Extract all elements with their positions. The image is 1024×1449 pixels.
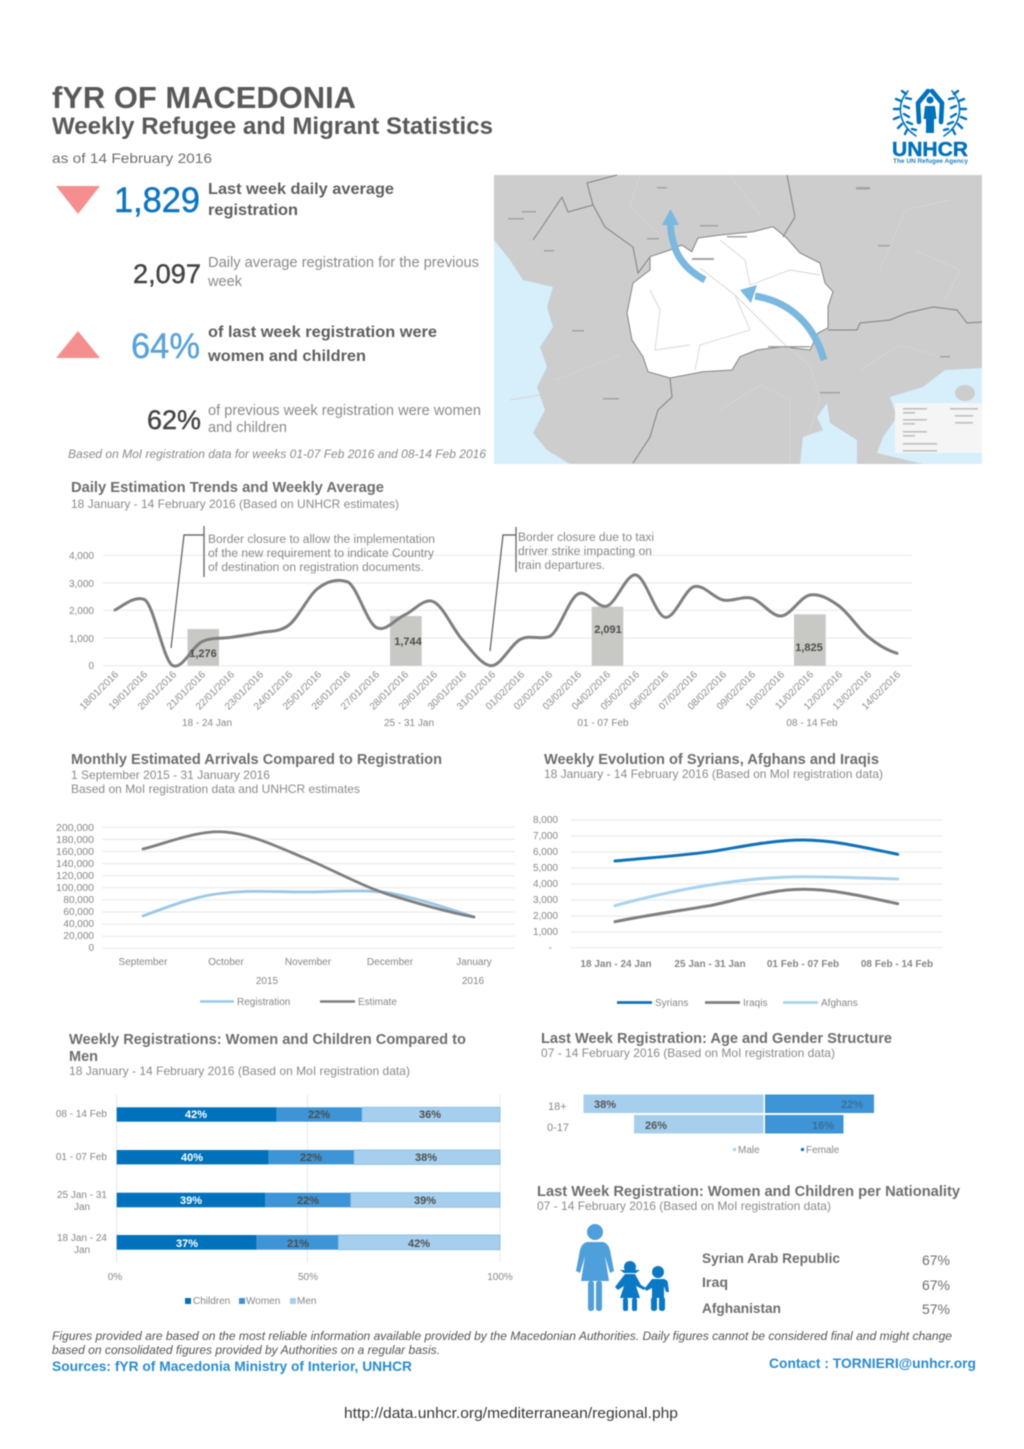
- heading: weekly nationality evolution: Weekly Evolution of Syrians, Afghans and Iraqis: [544, 752, 879, 768]
- date axis labels: 03/02/2016: [541, 669, 584, 713]
- week labels: 01 - 07 Feb: [577, 718, 629, 729]
- week labels: 18 Jan - 24 Jan: [580, 959, 652, 970]
- title: fYR OF MACEDONIA: [52, 80, 356, 115]
- icon: down triangle: [56, 186, 100, 214]
- y axis labels: 1,000: [69, 634, 94, 645]
- y axis labels: 4,000: [533, 879, 558, 890]
- y axis labels: 5,000: [533, 863, 558, 874]
- bar values: 1,825: [795, 642, 823, 654]
- y axis labels: 160,000: [56, 847, 94, 858]
- heading: daily estimation trends: Daily Estimation Trends and Weekly Average: [71, 480, 384, 496]
- y axis labels: 0: [88, 661, 94, 672]
- y axis labels: -: [549, 943, 552, 954]
- legend: [200, 997, 397, 1008]
- y axis labels: 140,000: [56, 859, 94, 870]
- bar values: 1,744: [394, 636, 423, 648]
- week labels: 25 Jan - 31 Jan: [674, 959, 746, 970]
- figure: women and children last week: of last week registration were: [208, 324, 437, 341]
- legend: Female: [806, 1145, 840, 1156]
- heading: women and children per nationality: 07 - 14 February 2016 (Based on MoI registration data): [537, 1199, 831, 1213]
- place name marks: [508, 187, 950, 400]
- y axis labels: 7,000: [533, 831, 558, 842]
- row: 08 - 14 Feb: 42%: [185, 1109, 207, 1121]
- week labels: 01 Feb - 07 Feb: [767, 959, 839, 970]
- figure: women and children previous week: of previous week registration were women: [208, 402, 481, 419]
- heading: age and gender: Last Week Registration: Age and Gender Structure: [541, 1031, 892, 1047]
- laurel wreath: [894, 91, 966, 136]
- y axis labels: 180,000: [56, 835, 94, 846]
- date axis labels: 07/02/2016: [657, 669, 700, 713]
- date axis labels: 21/01/2016: [165, 669, 208, 713]
- date axis labels: 04/02/2016: [570, 669, 613, 713]
- y axis labels: [56, 823, 94, 954]
- row: 08 - 14 Feb: 08 - 14 Feb: [56, 1109, 107, 1120]
- date axis labels: 20/01/2016: [136, 669, 179, 713]
- legend: Registration: [237, 997, 290, 1008]
- table: women and children per nationality: Afghanistan: [702, 1300, 781, 1316]
- chart: monthly arrivals vs registration: [56, 823, 515, 1008]
- row: 18 Jan - 24 Jan: 42%: [408, 1238, 430, 1250]
- row: 18 Jan - 24 Jan: 21%: [287, 1238, 309, 1250]
- heading: women and children vs men: Men: [69, 1049, 98, 1065]
- date axis labels: 19/01/2016: [107, 669, 150, 713]
- legend: Women: [246, 1296, 280, 1307]
- contact: Contact : TORNIERI@unhcr.org: [769, 1355, 976, 1371]
- chart: age and gender pyramid: 16%: [812, 1120, 834, 1132]
- date axis labels: 18/01/2016: [78, 669, 121, 713]
- chart: age and gender pyramid: [547, 1094, 874, 1156]
- line: registration: [143, 891, 474, 917]
- row: 25 - 31 Jan: [57, 1190, 500, 1213]
- figure: previous week daily average: Daily average registration for the previous: [208, 254, 479, 271]
- month labels: November: [285, 957, 332, 968]
- y axis labels: 2,000: [69, 606, 94, 617]
- line: Iraqis: [615, 889, 898, 922]
- icon: up triangle: [56, 331, 100, 358]
- figure: women and children previous week: [147, 402, 481, 436]
- note: data basis: Based on MoI registration data for weeks 01-07 Feb 2016 and 08-14 Feb 2016: [68, 447, 486, 461]
- row: 18 Jan - 24 Jan: 18 Jan - 24: [57, 1233, 107, 1244]
- month labels: January: [456, 957, 492, 968]
- x axis labels: 100%: [487, 1272, 513, 1283]
- table: women and children per nationality: [702, 1250, 950, 1317]
- callout: border closure, new requirement: of the new requirement to indicate Country: [208, 548, 434, 560]
- legend: [617, 998, 858, 1009]
- legend: Male: [738, 1145, 760, 1156]
- legend: Estimate: [358, 997, 397, 1008]
- row: 01 - 07 Feb: [56, 1150, 500, 1164]
- arrow: route from Greece: [740, 285, 824, 360]
- row: 18 Jan - 24 Jan: 37%: [176, 1238, 198, 1250]
- heading: weekly nationality evolution: [544, 752, 883, 781]
- callout: border closure, new requirement: [171, 526, 435, 648]
- figure: previous week daily average: 2,097: [133, 259, 201, 289]
- arrow: northbound route: [662, 209, 705, 280]
- legend: Children: [193, 1296, 230, 1307]
- x axis labels: [108, 1272, 513, 1283]
- week labels: 18 - 24 Jan: [182, 718, 232, 729]
- chart: daily estimation line with weekly average bars: [69, 526, 912, 729]
- country borders: [533, 175, 982, 463]
- line: Afghans: [615, 877, 898, 906]
- row: 25 - 31 Jan: 25 Jan - 31: [57, 1190, 107, 1201]
- heading: women and children vs men: Weekly Registrations: Women and Children Compared to: [69, 1032, 466, 1048]
- y axis labels: 8,000: [533, 815, 558, 826]
- y axis labels: 3,000: [533, 895, 558, 906]
- bar values: 1,276: [189, 648, 217, 660]
- month labels: 2015: [256, 976, 279, 987]
- row: 25 - 31 Jan: Jan: [74, 1202, 90, 1213]
- chart: age and gender pyramid: 22%: [841, 1099, 863, 1111]
- date axis labels: 27/01/2016: [339, 669, 382, 713]
- date axis labels: 26/01/2016: [310, 669, 353, 713]
- icon: UNHCR logo: UNHCR: [892, 139, 969, 161]
- row: 01 - 07 Feb: 22%: [300, 1152, 322, 1164]
- week labels: [580, 959, 933, 970]
- x axis labels: 0%: [108, 1272, 122, 1283]
- bar values: [189, 624, 823, 660]
- legend box: [895, 403, 982, 453]
- title: as of 14 February 2016: [52, 150, 212, 166]
- month labels: September: [119, 957, 168, 968]
- figure: last week daily average: [114, 181, 394, 220]
- date axis labels: 13/02/2016: [831, 669, 874, 713]
- figure: last week daily average: 1,829: [114, 181, 200, 220]
- callout: border closure, taxi strike: driver strike impacting on: [518, 546, 652, 558]
- row: 08 - 14 Feb: 22%: [308, 1109, 330, 1121]
- figure: last week daily average: registration: [208, 202, 298, 219]
- bar values: 2,091: [594, 624, 622, 636]
- y axis labels: 4,000: [69, 551, 94, 562]
- date axis labels: 30/01/2016: [426, 669, 469, 713]
- y axis labels: 20,000: [63, 931, 94, 942]
- title: Weekly Refugee and Migrant Statistics: [52, 113, 493, 140]
- date axis labels: [78, 669, 903, 713]
- figure: women and children last week: women and children: [207, 348, 366, 365]
- legend: [185, 1296, 316, 1307]
- callout: border closure, new requirement: of destination on registration documents.: [208, 562, 424, 574]
- heading: daily estimation trends: 18 January - 14 February 2016 (Based on UNHCR estimates): [71, 497, 399, 511]
- heading: women and children per nationality: [537, 1184, 960, 1213]
- table: women and children per nationality: 67%: [922, 1277, 950, 1293]
- date axis labels: 24/01/2016: [252, 669, 295, 713]
- figure: last week daily average: Last week daily average: [208, 181, 394, 198]
- y axis labels: 100,000: [56, 883, 94, 894]
- figure: women and children last week: 64%: [131, 327, 200, 366]
- date axis labels: 10/02/2016: [744, 669, 787, 713]
- date axis labels: 22/01/2016: [194, 669, 237, 713]
- chart: age and gender pyramid: 38%: [594, 1099, 616, 1111]
- heading: monthly arrivals: Based on MoI registration data and UNHCR estimates: [71, 782, 360, 796]
- row: 08 - 14 Feb: [56, 1107, 500, 1122]
- y axis labels: 3,000: [69, 579, 94, 590]
- legend: [733, 1145, 840, 1156]
- date axis labels: 23/01/2016: [223, 669, 266, 713]
- footer note: [52, 1329, 952, 1357]
- callout: border closure, taxi strike: train departures.: [518, 560, 605, 572]
- chart: stacked bars women, children, men: [56, 1095, 513, 1307]
- table: women and children per nationality: Iraq: [702, 1274, 728, 1290]
- person: [924, 96, 936, 133]
- row: 18 Jan - 24 Jan: [57, 1233, 500, 1256]
- legend: Iraqis: [743, 998, 767, 1009]
- y axis labels: 2,000: [533, 911, 558, 922]
- sources: Sources: fYR of Macedonia Ministry of Interior, UNHCR: [52, 1358, 412, 1374]
- table: women and children per nationality: 57%: [922, 1301, 950, 1317]
- footer note: based on consolidated figures provided by Authorities on a regular basis.: [52, 1343, 440, 1357]
- date axis labels: 28/01/2016: [368, 669, 411, 713]
- date axis labels: 25/01/2016: [281, 669, 324, 713]
- heading: daily estimation trends: [71, 480, 399, 511]
- callout: border closure, taxi strike: Border closure due to taxi: [518, 532, 654, 544]
- y axis labels: 0: [88, 943, 94, 954]
- y axis labels: 120,000: [56, 871, 94, 882]
- line: Syrians: [615, 840, 898, 861]
- chart: weekly evolution by nationality: [533, 815, 943, 1009]
- y axis labels: 6,000: [533, 847, 558, 858]
- row: 01 - 07 Feb: 40%: [181, 1152, 203, 1164]
- week labels: 25 - 31 Jan: [384, 718, 434, 729]
- figure: previous week daily average: week: [207, 273, 242, 290]
- date axis labels: 01/02/2016: [484, 669, 527, 713]
- heading: women and children vs men: 18 January - 14 February 2016 (Based on MoI registration data): [69, 1064, 410, 1078]
- date axis labels: 14/02/2016: [860, 669, 903, 713]
- row: 18 Jan - 24 Jan: Jan: [74, 1245, 90, 1256]
- y axis labels: [69, 551, 94, 672]
- legend: Men: [297, 1296, 316, 1307]
- daily line: [115, 575, 897, 666]
- line: estimate: [143, 832, 474, 917]
- row: 25 - 31 Jan: 39%: [180, 1195, 202, 1207]
- month labels: October: [208, 957, 244, 968]
- month labels: [119, 957, 492, 987]
- row: 25 - 31 Jan: 39%: [414, 1195, 436, 1207]
- week labels: 08 Feb - 14 Feb: [861, 959, 933, 970]
- week labels: 08 - 14 Feb: [786, 718, 838, 729]
- heading: women and children vs men: [69, 1032, 466, 1078]
- minor roads and regions: [510, 175, 960, 464]
- month labels: 2016: [462, 976, 485, 987]
- x axis labels: 50%: [298, 1272, 318, 1283]
- chart: age and gender pyramid: 26%: [645, 1120, 667, 1132]
- figure: women and children last week: [131, 324, 437, 366]
- date axis labels: 08/02/2016: [686, 669, 729, 713]
- icon: UNHCR logo: [892, 91, 969, 165]
- y axis labels: 200,000: [56, 823, 94, 834]
- heading: monthly arrivals: [71, 752, 442, 796]
- figure: women and children previous week: and children: [208, 419, 287, 436]
- date axis labels: 12/02/2016: [802, 669, 845, 713]
- heading: women and children per nationality: Last Week Registration: Women and Children per Nationality: [537, 1184, 960, 1200]
- date axis labels: 05/02/2016: [599, 669, 642, 713]
- heading: monthly arrivals: Monthly Estimated Arrivals Compared to Registration: [71, 752, 442, 768]
- legend: Syrians: [655, 998, 688, 1009]
- title: [52, 80, 493, 166]
- y axis labels: 1,000: [533, 927, 558, 938]
- table: women and children per nationality: 67%: [922, 1252, 950, 1268]
- callout: border closure, taxi strike: [490, 527, 654, 651]
- date axis labels: 06/02/2016: [628, 669, 671, 713]
- heading: weekly nationality evolution: 18 January - 14 February 2016 (Based on MoI registration data): [544, 767, 883, 781]
- row: 25 - 31 Jan: 22%: [297, 1195, 319, 1207]
- row: 01 - 07 Feb: 01 - 07 Feb: [56, 1152, 107, 1163]
- icon: UNHCR logo: The UN Refugee Agency: [893, 158, 968, 165]
- callout: border closure, new requirement: Border closure to allow the implementation: [208, 534, 435, 546]
- figure: previous week daily average: [133, 254, 479, 290]
- heading: age and gender: [541, 1031, 892, 1060]
- sheltering hands: [918, 91, 942, 122]
- weekly average bars: [188, 607, 826, 666]
- y axis labels: 80,000: [63, 895, 94, 906]
- row: 08 - 14 Feb: 36%: [419, 1109, 441, 1121]
- legend: Afghans: [821, 998, 858, 1009]
- figure: women and children previous week: 62%: [147, 405, 201, 435]
- age labels: 0-17: [547, 1122, 569, 1134]
- age labels: [547, 1101, 569, 1134]
- age labels: 18+: [548, 1101, 567, 1113]
- panel: headline figures: [56, 181, 486, 461]
- heading: monthly arrivals: 1 September 2015 - 31 January 2016: [71, 768, 270, 782]
- footer note: Figures provided are based on the most reliable information available provided by the Macedonian Authorities. Daily figures cannot be considered final and might change: [52, 1329, 952, 1343]
- date axis labels: 29/01/2016: [397, 669, 440, 713]
- y axis labels: [533, 815, 558, 954]
- y axis labels: 40,000: [63, 919, 94, 930]
- date axis labels: 02/02/2016: [512, 669, 555, 713]
- date axis labels: 31/01/2016: [455, 669, 498, 713]
- y axis labels: 60,000: [63, 907, 94, 918]
- date axis labels: 11/02/2016: [773, 669, 816, 712]
- table: women and children per nationality: Syrian Arab Republic: [702, 1250, 840, 1266]
- heading: age and gender: 07 - 14 February 2016 (Based on MoI registration data): [541, 1046, 835, 1060]
- row: 01 - 07 Feb: 38%: [415, 1152, 437, 1164]
- month labels: December: [367, 957, 414, 968]
- map: [494, 175, 982, 464]
- week labels: [182, 718, 838, 729]
- date axis labels: 09/02/2016: [715, 669, 758, 713]
- icon: woman and children: [576, 1224, 669, 1311]
- url: http://data.unhcr.org/mediterranean/regional.php: [344, 1405, 678, 1422]
